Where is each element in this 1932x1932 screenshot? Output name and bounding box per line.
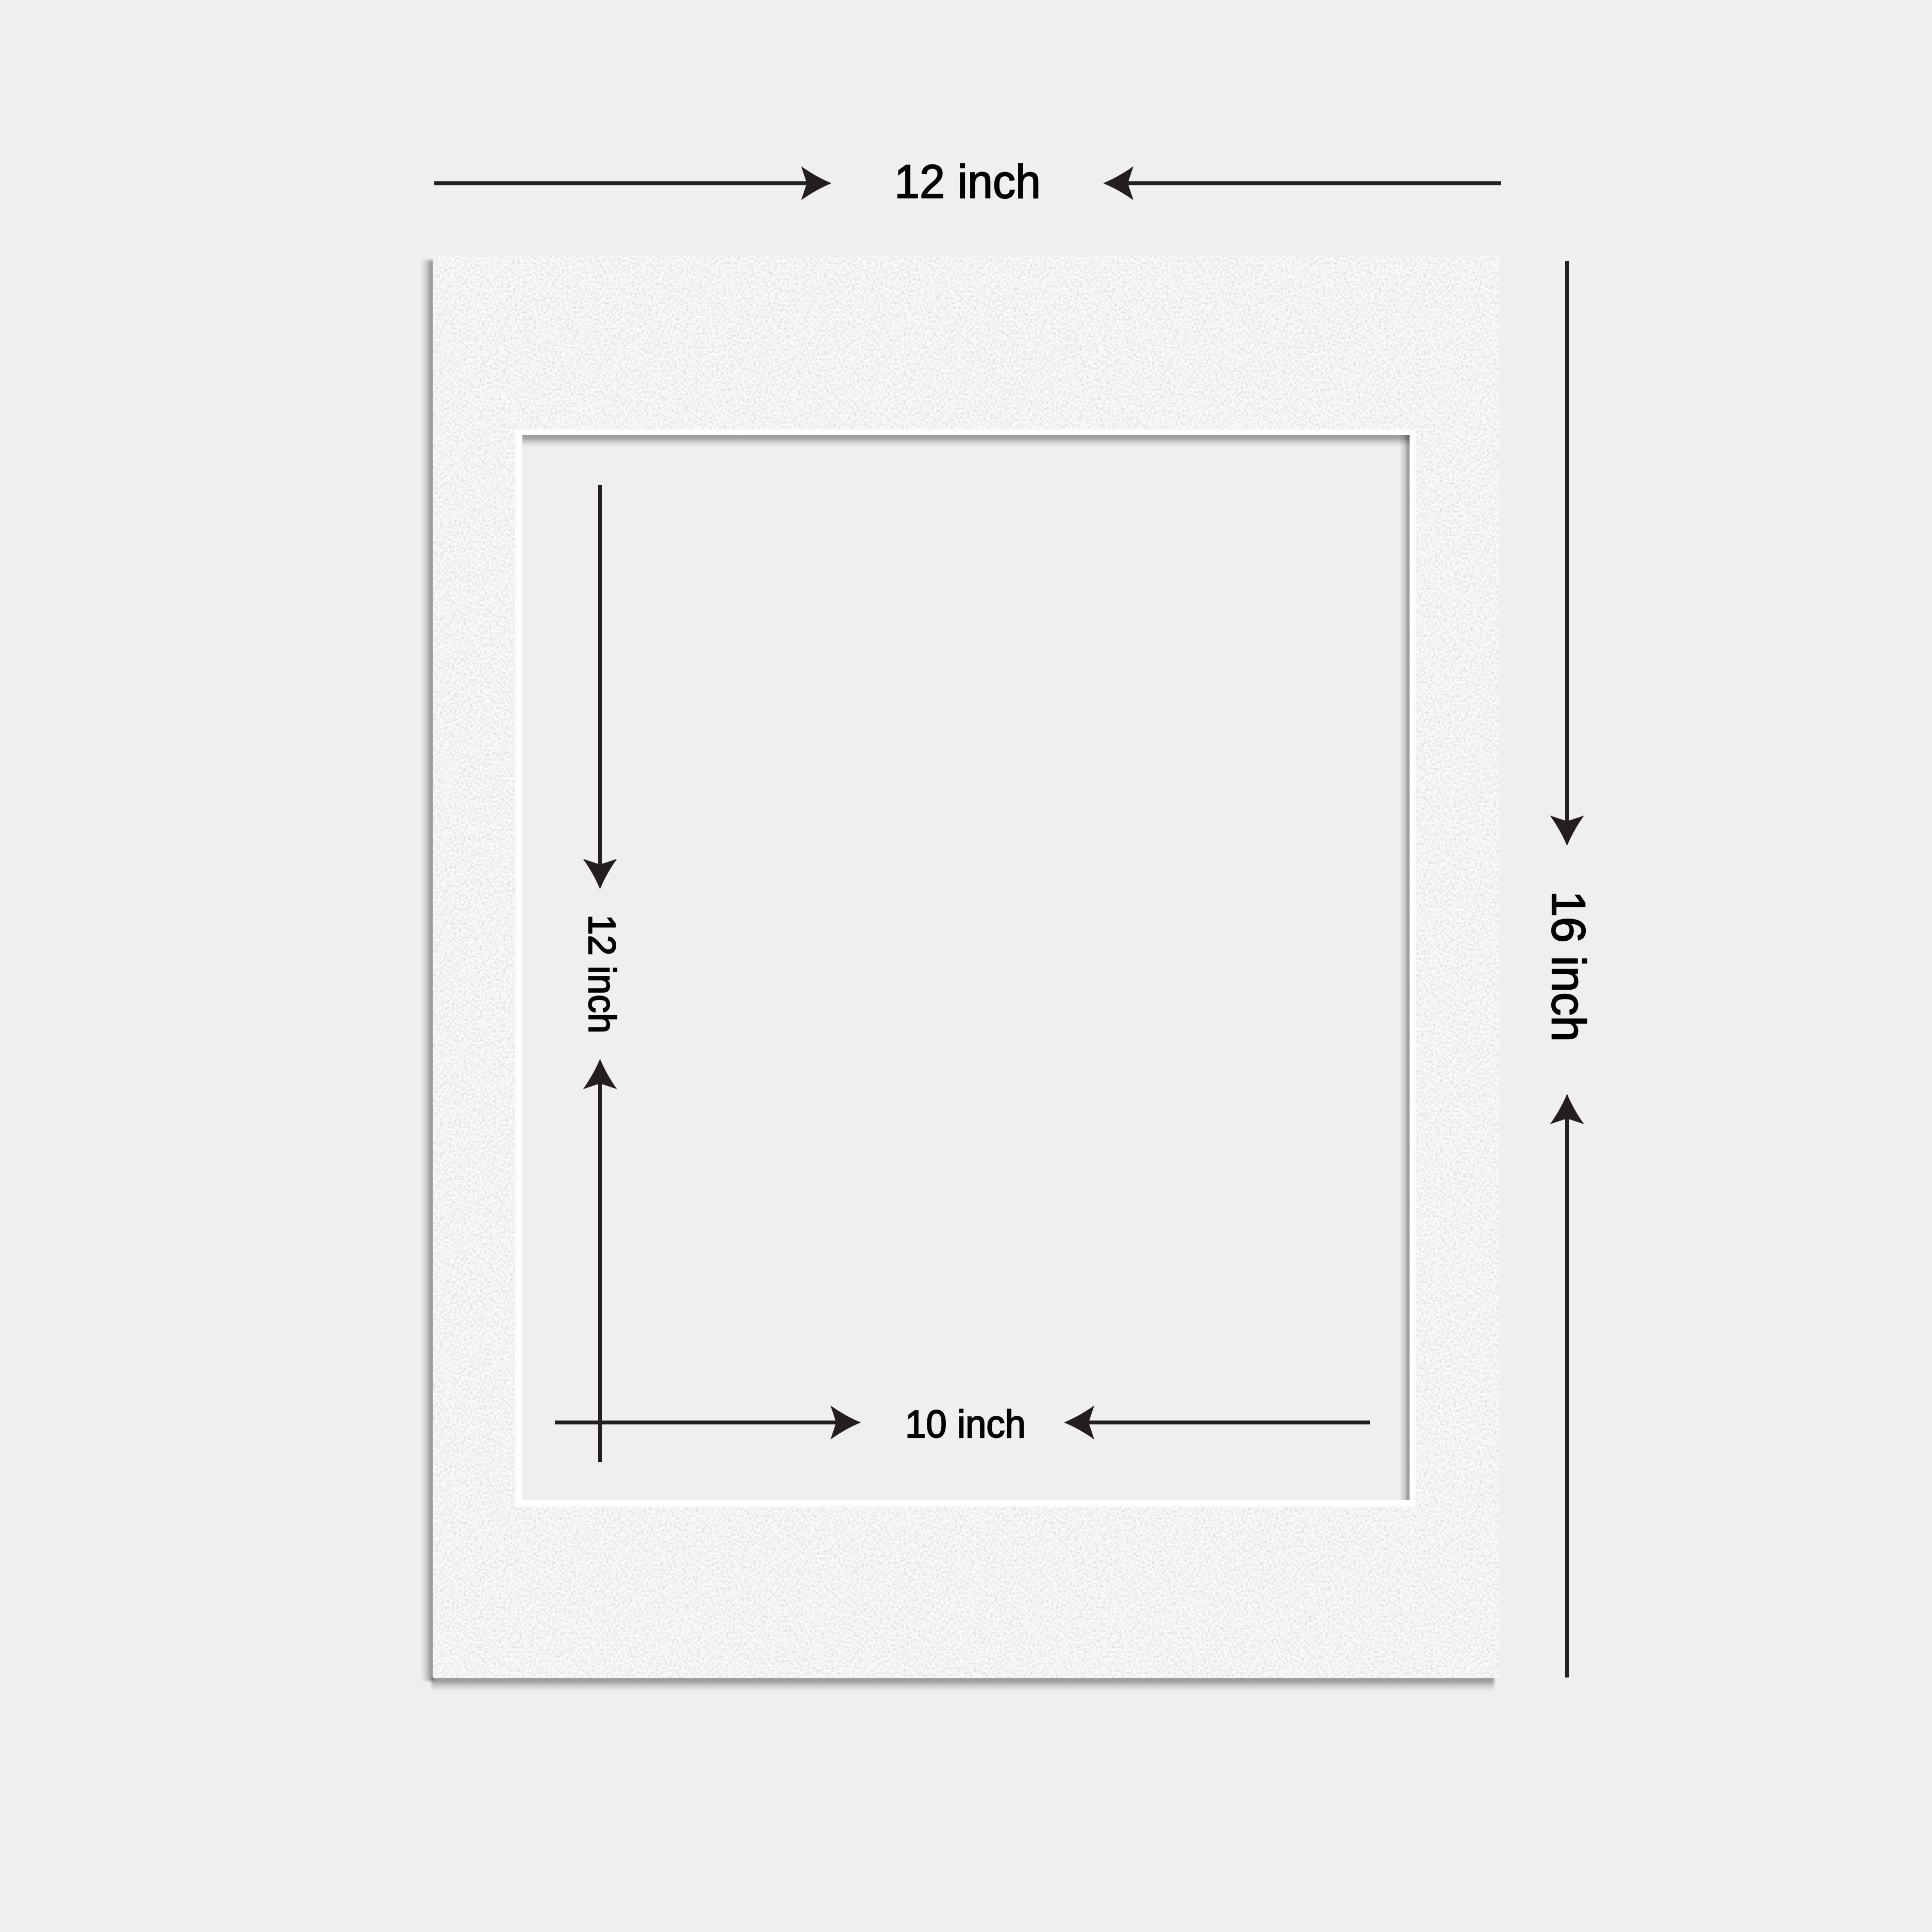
bottom arrow pointing up (1550, 1094, 1584, 1677)
mat paper grain (433, 256, 1499, 1678)
window height dimension: 12 inch (581, 485, 623, 1462)
label: 12 inch: 12 inch (581, 914, 623, 1033)
white bevel around window (515, 429, 1416, 1507)
top arrow pointing down (1550, 261, 1584, 846)
label: 12 inch: 12 inch (894, 156, 1041, 208)
mat surface with window opening (433, 256, 1499, 1678)
mat outer drop shadow (420, 260, 1494, 1691)
mat board (420, 256, 1499, 1691)
outer width dimension: 12 inch (434, 156, 1501, 208)
top arrow pointing down (583, 485, 617, 889)
right arrow pointing left (1064, 1405, 1370, 1439)
outer height dimension: 16 inch (1542, 261, 1595, 1677)
label: 16 inch: 16 inch (1542, 891, 1595, 1042)
window inner shadows (522, 435, 1410, 1500)
label: 10 inch: 10 inch (905, 1402, 1026, 1446)
right arrow pointing left (1103, 166, 1501, 200)
left arrow pointing right (434, 166, 832, 200)
left arrow pointing right (555, 1405, 861, 1439)
window width dimension: 10 inch (555, 1402, 1370, 1446)
bottom arrow pointing up (583, 1059, 617, 1462)
bright inner bevel edge (517, 431, 1414, 1505)
